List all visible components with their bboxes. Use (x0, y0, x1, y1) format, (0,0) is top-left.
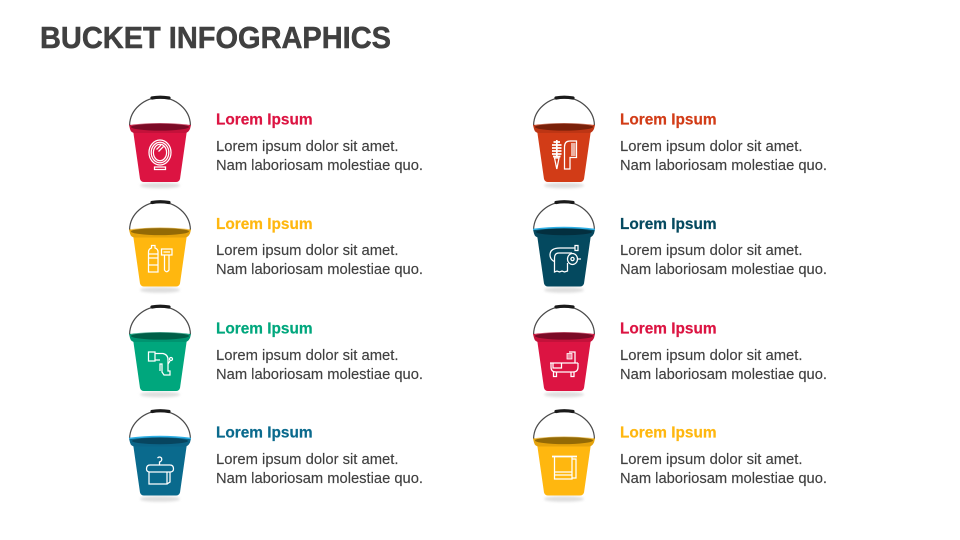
text block (216, 424, 423, 487)
text block: Lorem Ipsum (620, 424, 716, 442)
item 8: hanging towel bucket (533, 411, 827, 502)
text block (620, 320, 827, 383)
icon: bathtub with shower (550, 352, 578, 376)
title: BUCKET INFOGRAPHICS (40, 20, 391, 55)
text block (620, 216, 827, 278)
text block: Nam laboriosam molestiae quo. (216, 261, 423, 278)
text block: Lorem ipsum dolor sit amet. (216, 347, 398, 364)
icon: toilet paper roll (550, 246, 581, 272)
item 6: toilet paper bucket (533, 202, 827, 293)
text block: Lorem Ipsum (620, 112, 716, 128)
text block: Lorem ipsum dolor sit amet. (620, 347, 802, 364)
text block (216, 320, 423, 383)
bucket: orange red (533, 97, 595, 188)
text block: Nam laboriosam molestiae quo. (216, 470, 423, 487)
text block: Nam laboriosam molestiae quo. (620, 470, 827, 487)
bucket: teal blue (129, 411, 191, 502)
bucket: green (129, 306, 191, 397)
text block: Lorem Ipsum (216, 320, 312, 338)
text block: Nam laboriosam molestiae quo. (620, 366, 827, 383)
icon: brush and comb (552, 140, 576, 169)
text block (216, 112, 423, 174)
text block: Nam laboriosam molestiae quo. (620, 261, 827, 278)
text block: Lorem Ipsum (620, 320, 716, 338)
item 2: spray and razor bucket (129, 202, 423, 293)
text block (620, 112, 827, 174)
text block: Lorem ipsum dolor sit amet. (620, 138, 802, 155)
item 1: mirror bucket (129, 97, 423, 188)
icon: hanging towel (552, 456, 577, 479)
icon: mirror (149, 140, 171, 170)
item 4: towel hanger bucket (129, 411, 423, 502)
text block: Nam laboriosam molestiae quo. (216, 157, 423, 174)
text block (216, 216, 423, 278)
icon: shower head (148, 352, 172, 375)
text block: Lorem Ipsum (216, 216, 312, 233)
item 5: brush and comb bucket (533, 97, 827, 188)
text block (620, 424, 827, 487)
text block: Lorem Ipsum (216, 424, 312, 442)
text block: Lorem ipsum dolor sit amet. (216, 138, 398, 155)
text block: Lorem Ipsum (620, 216, 716, 233)
text block: Nam laboriosam molestiae quo. (216, 366, 423, 383)
item 3: shower head bucket (129, 306, 423, 397)
bucket: dark teal (533, 202, 595, 293)
text block: Nam laboriosam molestiae quo. (620, 157, 827, 174)
text block: Lorem ipsum dolor sit amet. (216, 242, 398, 259)
text block: Lorem ipsum dolor sit amet. (620, 451, 802, 468)
item 7: bathtub bucket (533, 306, 827, 397)
text block: Lorem ipsum dolor sit amet. (216, 451, 398, 468)
bucket: amber (533, 411, 595, 502)
bucket: amber (129, 202, 191, 293)
text block: Lorem ipsum dolor sit amet. (620, 242, 802, 259)
bucket: crimson (533, 306, 595, 397)
bucket: crimson (129, 97, 191, 188)
icon: towel on hanger (146, 457, 174, 484)
text block: Lorem Ipsum (216, 112, 312, 128)
icon: spray and razor (148, 246, 172, 272)
